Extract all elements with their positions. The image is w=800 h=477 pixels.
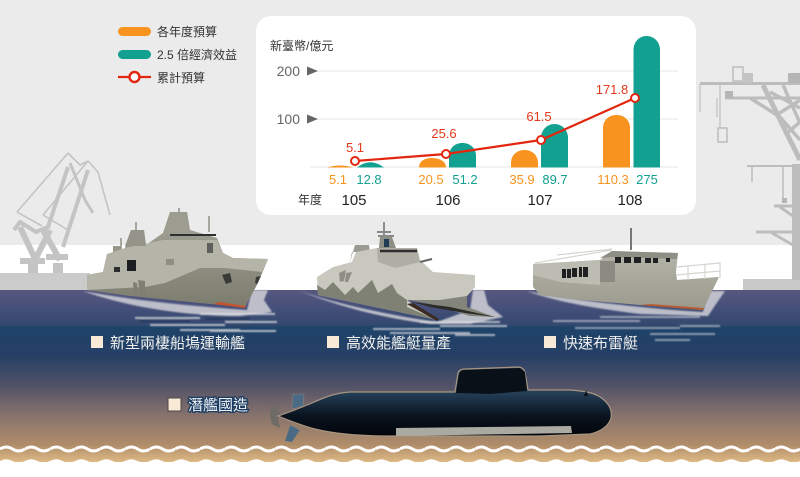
year axis: 105 (341, 192, 367, 209)
label: corvette: 高效能艦艇量產 (346, 335, 451, 352)
label: minelayer: 快速布雷艇 (563, 335, 638, 352)
year axis: 107 (527, 192, 553, 209)
bar values: 51.2 (452, 172, 478, 187)
legend (118, 24, 237, 85)
bar values: 5.1 (329, 172, 347, 187)
icon: right shipyard crane (700, 67, 800, 280)
year axis: 106 (435, 192, 461, 209)
legend: 各年度預算 (157, 24, 217, 39)
panel: chart card (256, 16, 696, 215)
bar values: 12.8 (356, 172, 382, 187)
legend: 累計預算 (157, 70, 205, 85)
bar values: 89.7 (542, 172, 568, 187)
bars: year 108 (603, 36, 660, 168)
wake: second ship (300, 290, 507, 335)
ship: high-efficiency corvette (317, 222, 495, 321)
background: sea (0, 290, 800, 462)
bars: year 105 (327, 162, 384, 168)
bar values: 20.5 (418, 172, 444, 187)
y axis labels: 100 (277, 111, 300, 127)
ship: fast minelayer (533, 228, 720, 310)
bars: year 106 (419, 143, 476, 168)
line: cumulative budget: 5.1 (346, 140, 364, 155)
wake: third ship (527, 291, 725, 340)
ship: amphibious dock landing ship (87, 208, 268, 308)
year axis: 108 (617, 192, 643, 209)
chart unit label: 新臺幣/億元 (270, 38, 333, 53)
label: dock landing ship: 新型兩棲船塢運輸艦 (110, 335, 245, 352)
line: cumulative budget (346, 82, 639, 165)
legend: 2.5 倍經濟效益 (157, 47, 237, 62)
bar values (329, 172, 658, 187)
wake: first ship (83, 290, 277, 331)
bottom waves (0, 444, 800, 477)
line: cumulative budget: 25.6 (431, 126, 457, 141)
label: submarine program: 潛艦國造 (188, 397, 248, 414)
line: cumulative budget: 61.5 (526, 109, 552, 124)
year axis: 年度 (298, 192, 322, 207)
submarine (270, 367, 611, 442)
y axis labels: 200 (277, 63, 300, 79)
icon: left shipyard cranes (14, 153, 110, 273)
background: sky and dock (0, 0, 800, 290)
bar values: 275 (636, 172, 658, 187)
line: cumulative budget: 171.8 (596, 82, 628, 97)
year axis (298, 192, 643, 209)
chart: budget bar and line chart (270, 36, 678, 209)
bars: year 107 (511, 124, 568, 168)
y axis labels (277, 63, 678, 167)
bar values: 35.9 (509, 172, 535, 187)
bar values: 110.3 (597, 172, 629, 187)
